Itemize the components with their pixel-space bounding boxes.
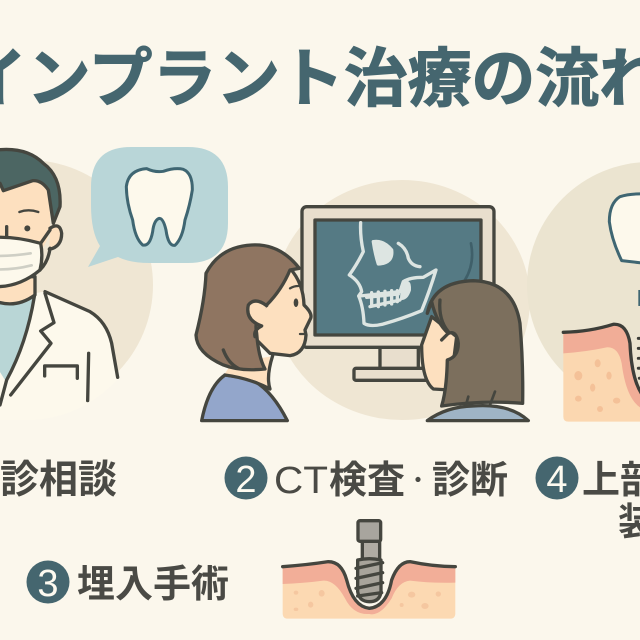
patient right: [422, 281, 528, 421]
socket outline: [283, 562, 455, 608]
step label: consultation: 診相談: [0, 459, 117, 502]
monitor: [302, 207, 494, 380]
icon: tooth: [126, 169, 192, 245]
implant diagram: [283, 521, 455, 619]
icon: crown: [609, 194, 640, 263]
doctor: [0, 149, 118, 420]
gum and bone: [283, 562, 455, 619]
step label: 2 CT: [224, 456, 508, 502]
panel: restoration illustration: [527, 162, 640, 422]
implant threads: [638, 338, 640, 378]
background circle: CT: [274, 180, 530, 420]
step label: 3 surgery: 埋入手術: [77, 564, 229, 606]
step label: 3 surgery: 3: [37, 563, 59, 605]
skull x-ray: [349, 223, 436, 326]
background circle: consultation: [0, 160, 153, 410]
step label: 2 CT: 検査: [329, 460, 405, 502]
panel: consultation illustration: [0, 147, 228, 420]
implant body: [356, 521, 383, 602]
step label: 2 CT: 診断: [432, 460, 508, 502]
step label: 2 CT: ・: [408, 470, 428, 492]
gum cross-section: [563, 324, 640, 422]
step label: 2 CT: 2: [235, 459, 257, 501]
patient left: [196, 245, 311, 421]
panel: CT examination illustration: [196, 180, 530, 421]
step label: 2 CT: CT: [274, 460, 328, 502]
abutment: [638, 290, 640, 306]
step label: 4 restoration: [536, 456, 640, 544]
step label: 3 surgery: [26, 560, 229, 606]
speech bubble with tooth: [88, 147, 228, 267]
step label: 4 restoration: 4: [546, 459, 568, 501]
background circle: restoration: [527, 162, 640, 408]
